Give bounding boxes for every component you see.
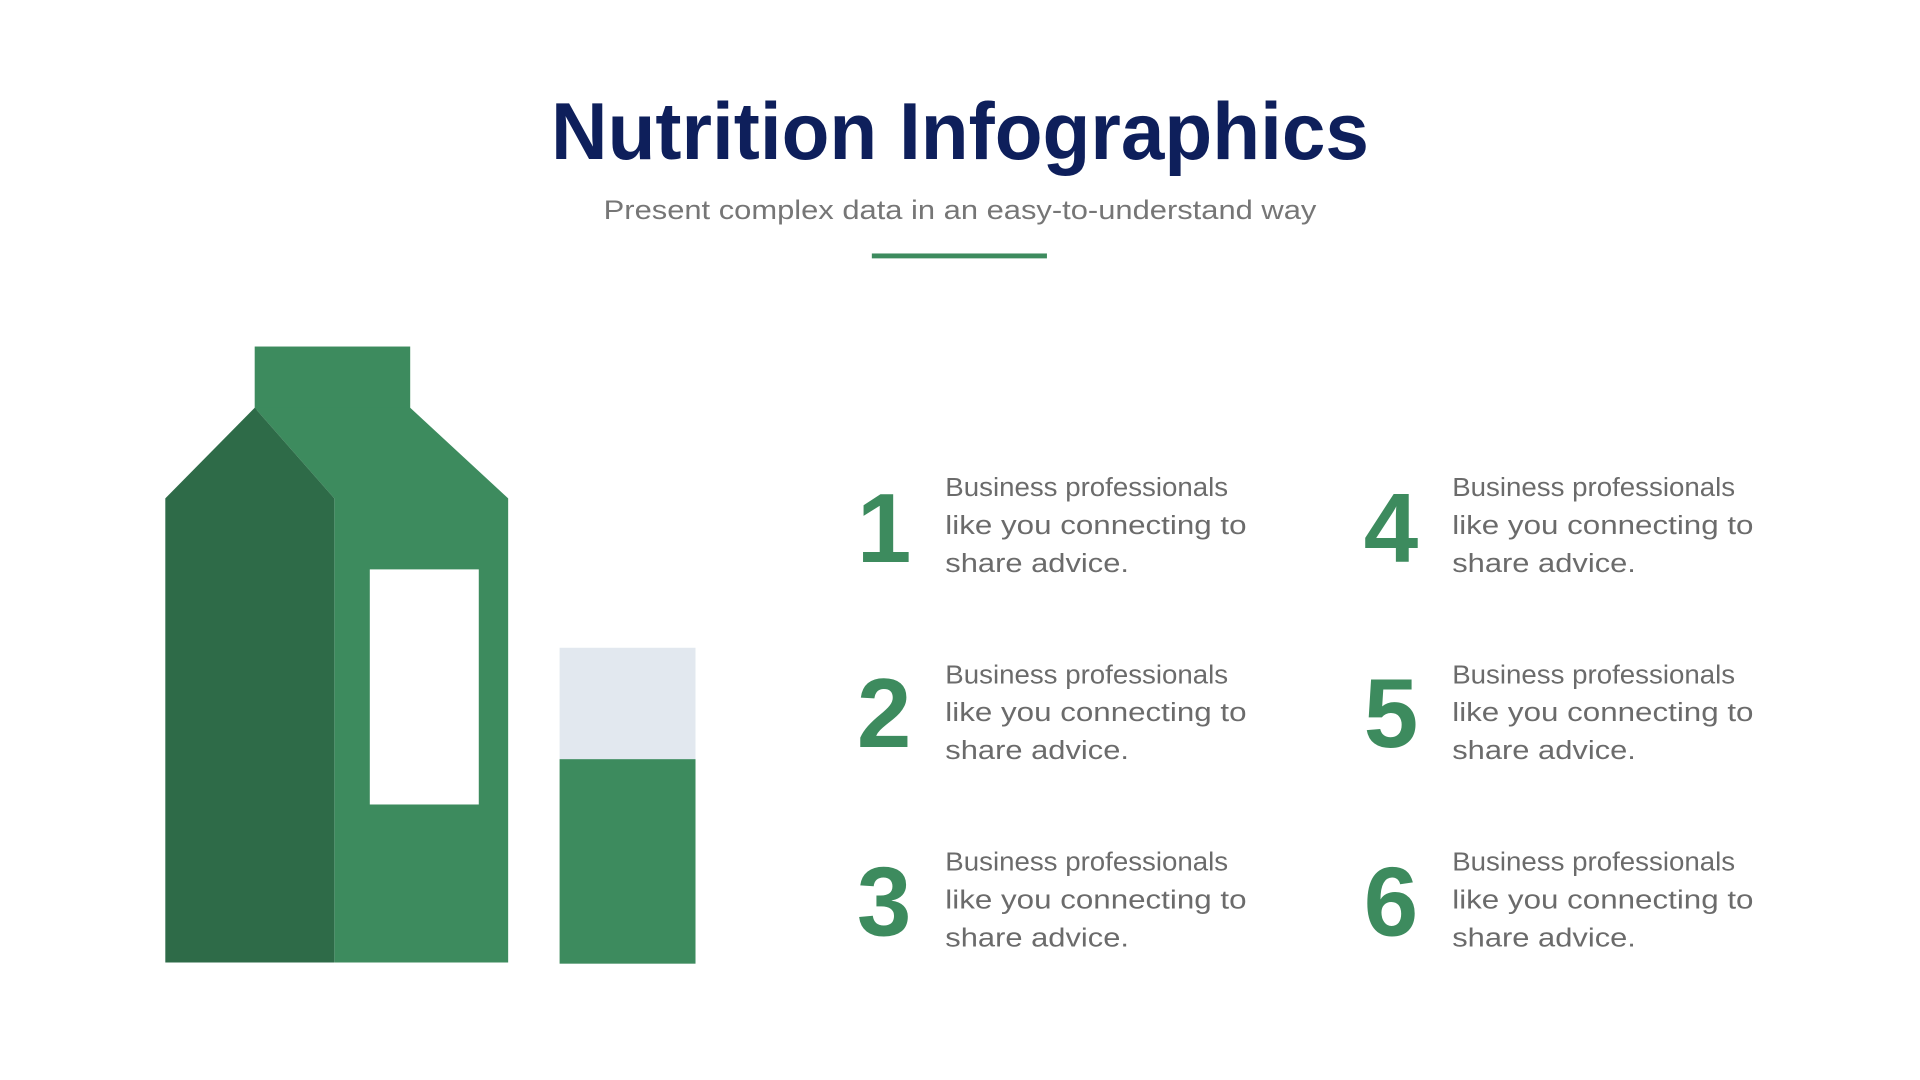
item 5: like you connecting to [1452,697,1753,727]
item 6 [1364,847,1753,957]
item 3: Business professionals [945,847,1228,877]
item 2 [857,658,1247,768]
item 2: like you connecting to [945,697,1247,727]
item 5: Business professionals [1452,659,1735,689]
item 6: 6 [1364,847,1418,957]
item 6: like you connecting to [1452,885,1753,915]
item 4: share advice. [1452,548,1636,578]
illustration: milk carton [165,347,508,962]
item 5: share advice. [1452,735,1636,765]
item 1: share advice. [945,548,1129,578]
title: Nutrition Infographics [551,87,1369,177]
item 2: 2 [857,658,911,768]
item 4: Business professionals [1452,472,1735,502]
item 3 [857,847,1247,957]
item 2: Business professionals [945,659,1228,689]
item 5 [1364,658,1753,768]
item 1: Business professionals [945,472,1228,502]
item 1 [857,472,1247,583]
item 6: share advice. [1452,923,1636,953]
carton label window [370,569,479,804]
item 2: share advice. [945,735,1129,765]
subtitle: Present complex data in an easy-to-understand way [604,195,1317,225]
item 4: 4 [1364,473,1418,583]
item 4 [1364,472,1753,583]
item 5: 5 [1364,658,1418,768]
item 6: Business professionals [1452,847,1735,877]
item 1: 1 [857,473,911,583]
item 3: like you connecting to [945,885,1247,915]
item 4: like you connecting to [1452,510,1753,540]
item 3: share advice. [945,923,1129,953]
item 3: 3 [857,847,911,957]
item 1: like you connecting to [945,510,1247,540]
illustration: glass of milk [560,648,696,964]
